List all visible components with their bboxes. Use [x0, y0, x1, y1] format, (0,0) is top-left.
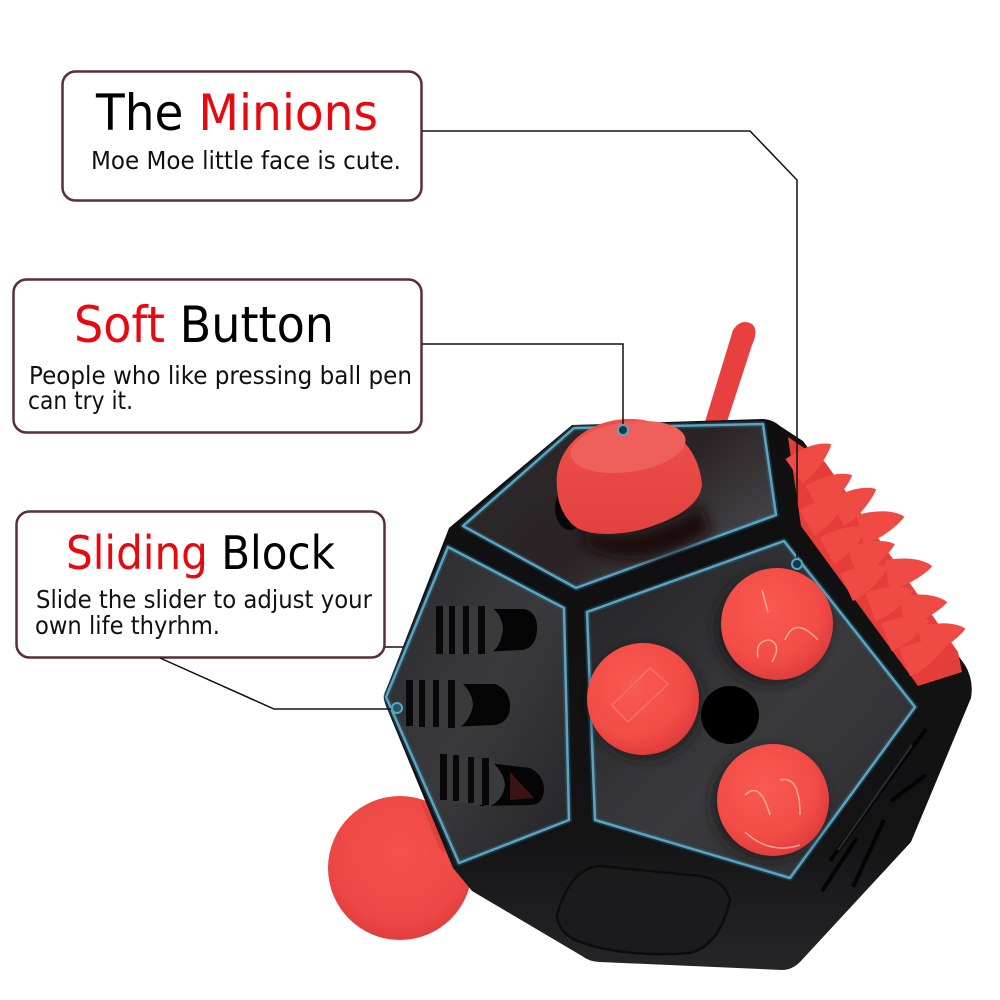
text: Minions description: Moe Moe little face is cute. — [91, 146, 401, 175]
panel: lower right face with slots — [822, 729, 926, 891]
leader line: Sliding Block to slider — [160, 647, 403, 713]
callout box: The Minions — [62, 72, 422, 200]
strap: red tab behind cube — [704, 322, 756, 425]
panel: center face with minion balls — [587, 541, 915, 878]
slider 1 — [436, 606, 537, 654]
panel: left face with sliding blocks — [386, 547, 569, 863]
heading: Soft Button: Soft Button — [74, 296, 334, 354]
cube body — [384, 419, 972, 970]
ball shadows — [590, 573, 826, 858]
slider 2 — [406, 680, 510, 728]
text: Soft Button description — [28, 361, 412, 415]
big red ball on stalk — [328, 796, 472, 940]
text: Soft Button description: People who like pressing ball pen — [29, 361, 412, 390]
minion ball: bottom right — [717, 744, 829, 856]
slider 3 — [440, 754, 544, 806]
soft button — [557, 414, 702, 534]
minion ball: left — [587, 643, 699, 755]
minion ball: top right — [721, 568, 833, 680]
heading: The Minions: The Minions — [95, 84, 378, 142]
text: Sliding Block description: own life thyrhm. — [35, 611, 220, 640]
panel: top face with soft button — [463, 414, 776, 588]
hole — [701, 686, 759, 744]
leader line: The Minions to ball — [422, 131, 802, 569]
text: Soft Button description: can try it. — [28, 386, 133, 415]
callout box: Soft Button — [14, 280, 422, 432]
heading: Sliding Block: Sliding Block — [66, 526, 335, 580]
leader line: Soft Button to button — [422, 344, 628, 435]
text: Sliding Block description: Slide the slider to adjust your — [36, 585, 373, 614]
spiked red side panel — [785, 433, 970, 686]
panel: bottom face with rocker — [557, 866, 730, 954]
callout box: Sliding Block — [16, 512, 384, 658]
text: Sliding Block description — [35, 585, 373, 640]
